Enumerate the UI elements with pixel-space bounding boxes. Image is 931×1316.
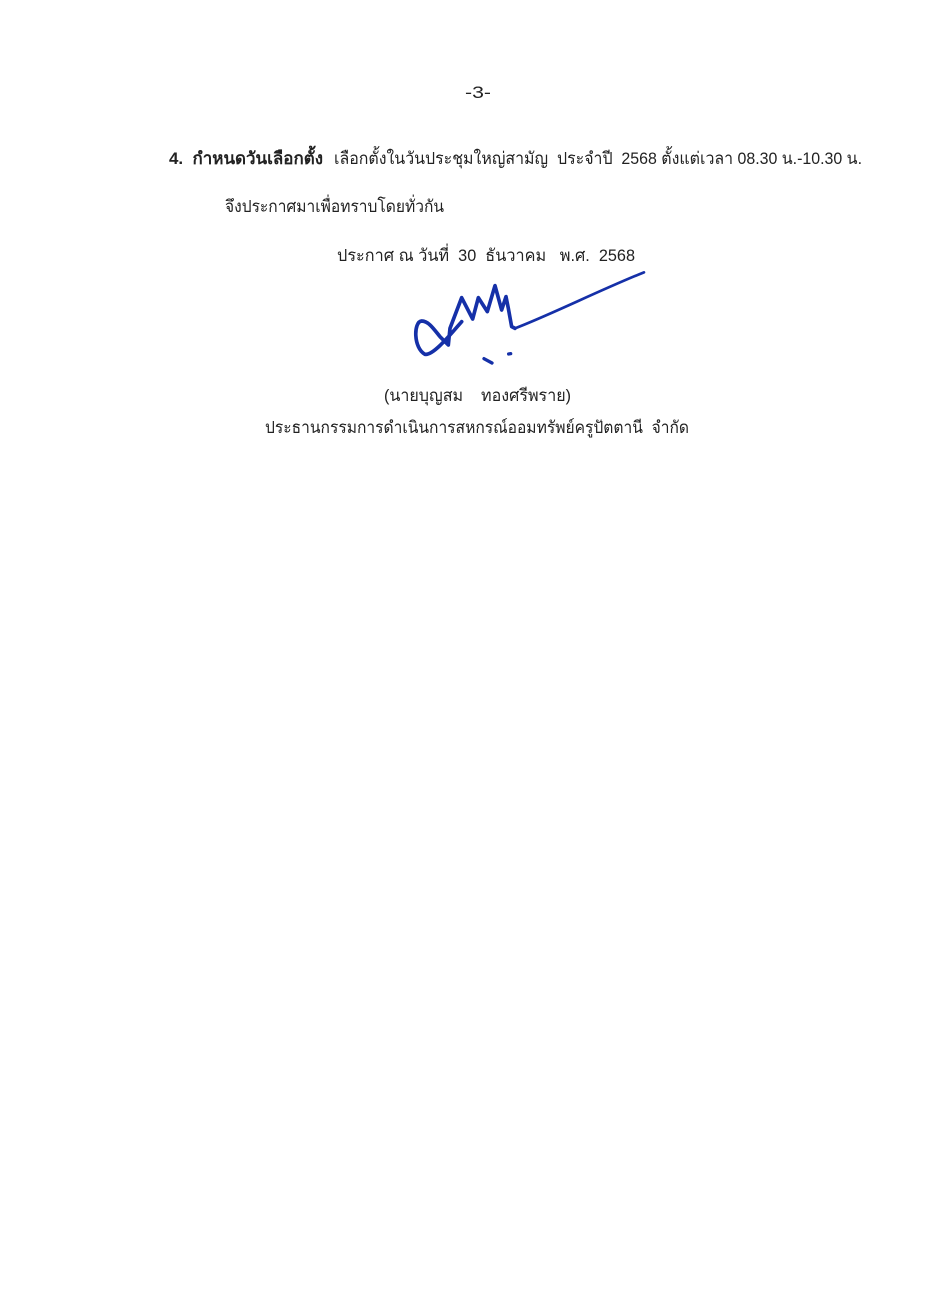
signatory name: (นายบุญสม ทองศรีพราย) [384, 386, 571, 406]
signature [416, 272, 644, 363]
page number: -3- [465, 83, 491, 102]
item body text: เลือกตั้งในวันประชุมใหญ่สามัญ ประจำปี 2568 ตั้งแต่เวลา 08.30 น.-10.30 น. [334, 146, 862, 169]
agenda item 4 [169, 145, 862, 169]
signatory title: ประธานกรรมการดำเนินการสหกรณ์ออมทรัพย์ครูปัตตานี จำกัด [265, 418, 689, 438]
closing statement: จึงประกาศมาเพื่อทราบโดยทั่วกัน [225, 194, 444, 216]
item heading: 4. กำหนดวันเลือกตั้ง [169, 145, 323, 168]
announcement date: ประกาศ ณ วันที่ 30 ธันวาคม พ.ศ. 2568 [337, 243, 635, 265]
